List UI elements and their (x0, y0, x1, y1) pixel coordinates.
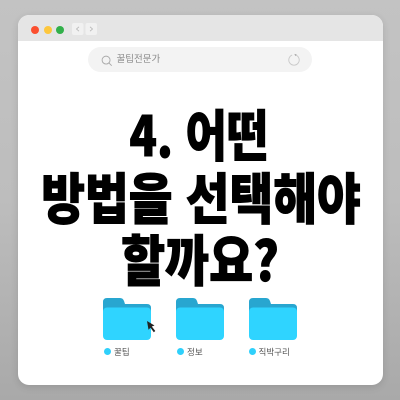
title: 할까요? (121, 217, 279, 297)
icon: reload (288, 54, 300, 66)
label: 꿀팁: 꿀팁 (114, 347, 130, 357)
label: 직박구리: 직박구리 (258, 347, 290, 357)
icon: magnifier (102, 56, 112, 66)
search text: 꿀팁전문가 (116, 54, 160, 64)
navigation buttons (72, 23, 97, 35)
folder: 꿀팁 (103, 298, 151, 340)
label: 정보 (177, 347, 203, 357)
folder: 직박구리 (249, 298, 297, 340)
title: 방법을 선택해야 (41, 155, 361, 235)
title bar (18, 15, 382, 41)
folder: 정보 (176, 298, 224, 340)
label: 꿀팁 (104, 347, 130, 357)
search bar (88, 47, 312, 72)
window controls (31, 26, 64, 34)
label: 정보: 정보 (187, 347, 203, 357)
title: 4. 어떤 (130, 94, 268, 172)
icon: mouse cursor (147, 321, 156, 332)
